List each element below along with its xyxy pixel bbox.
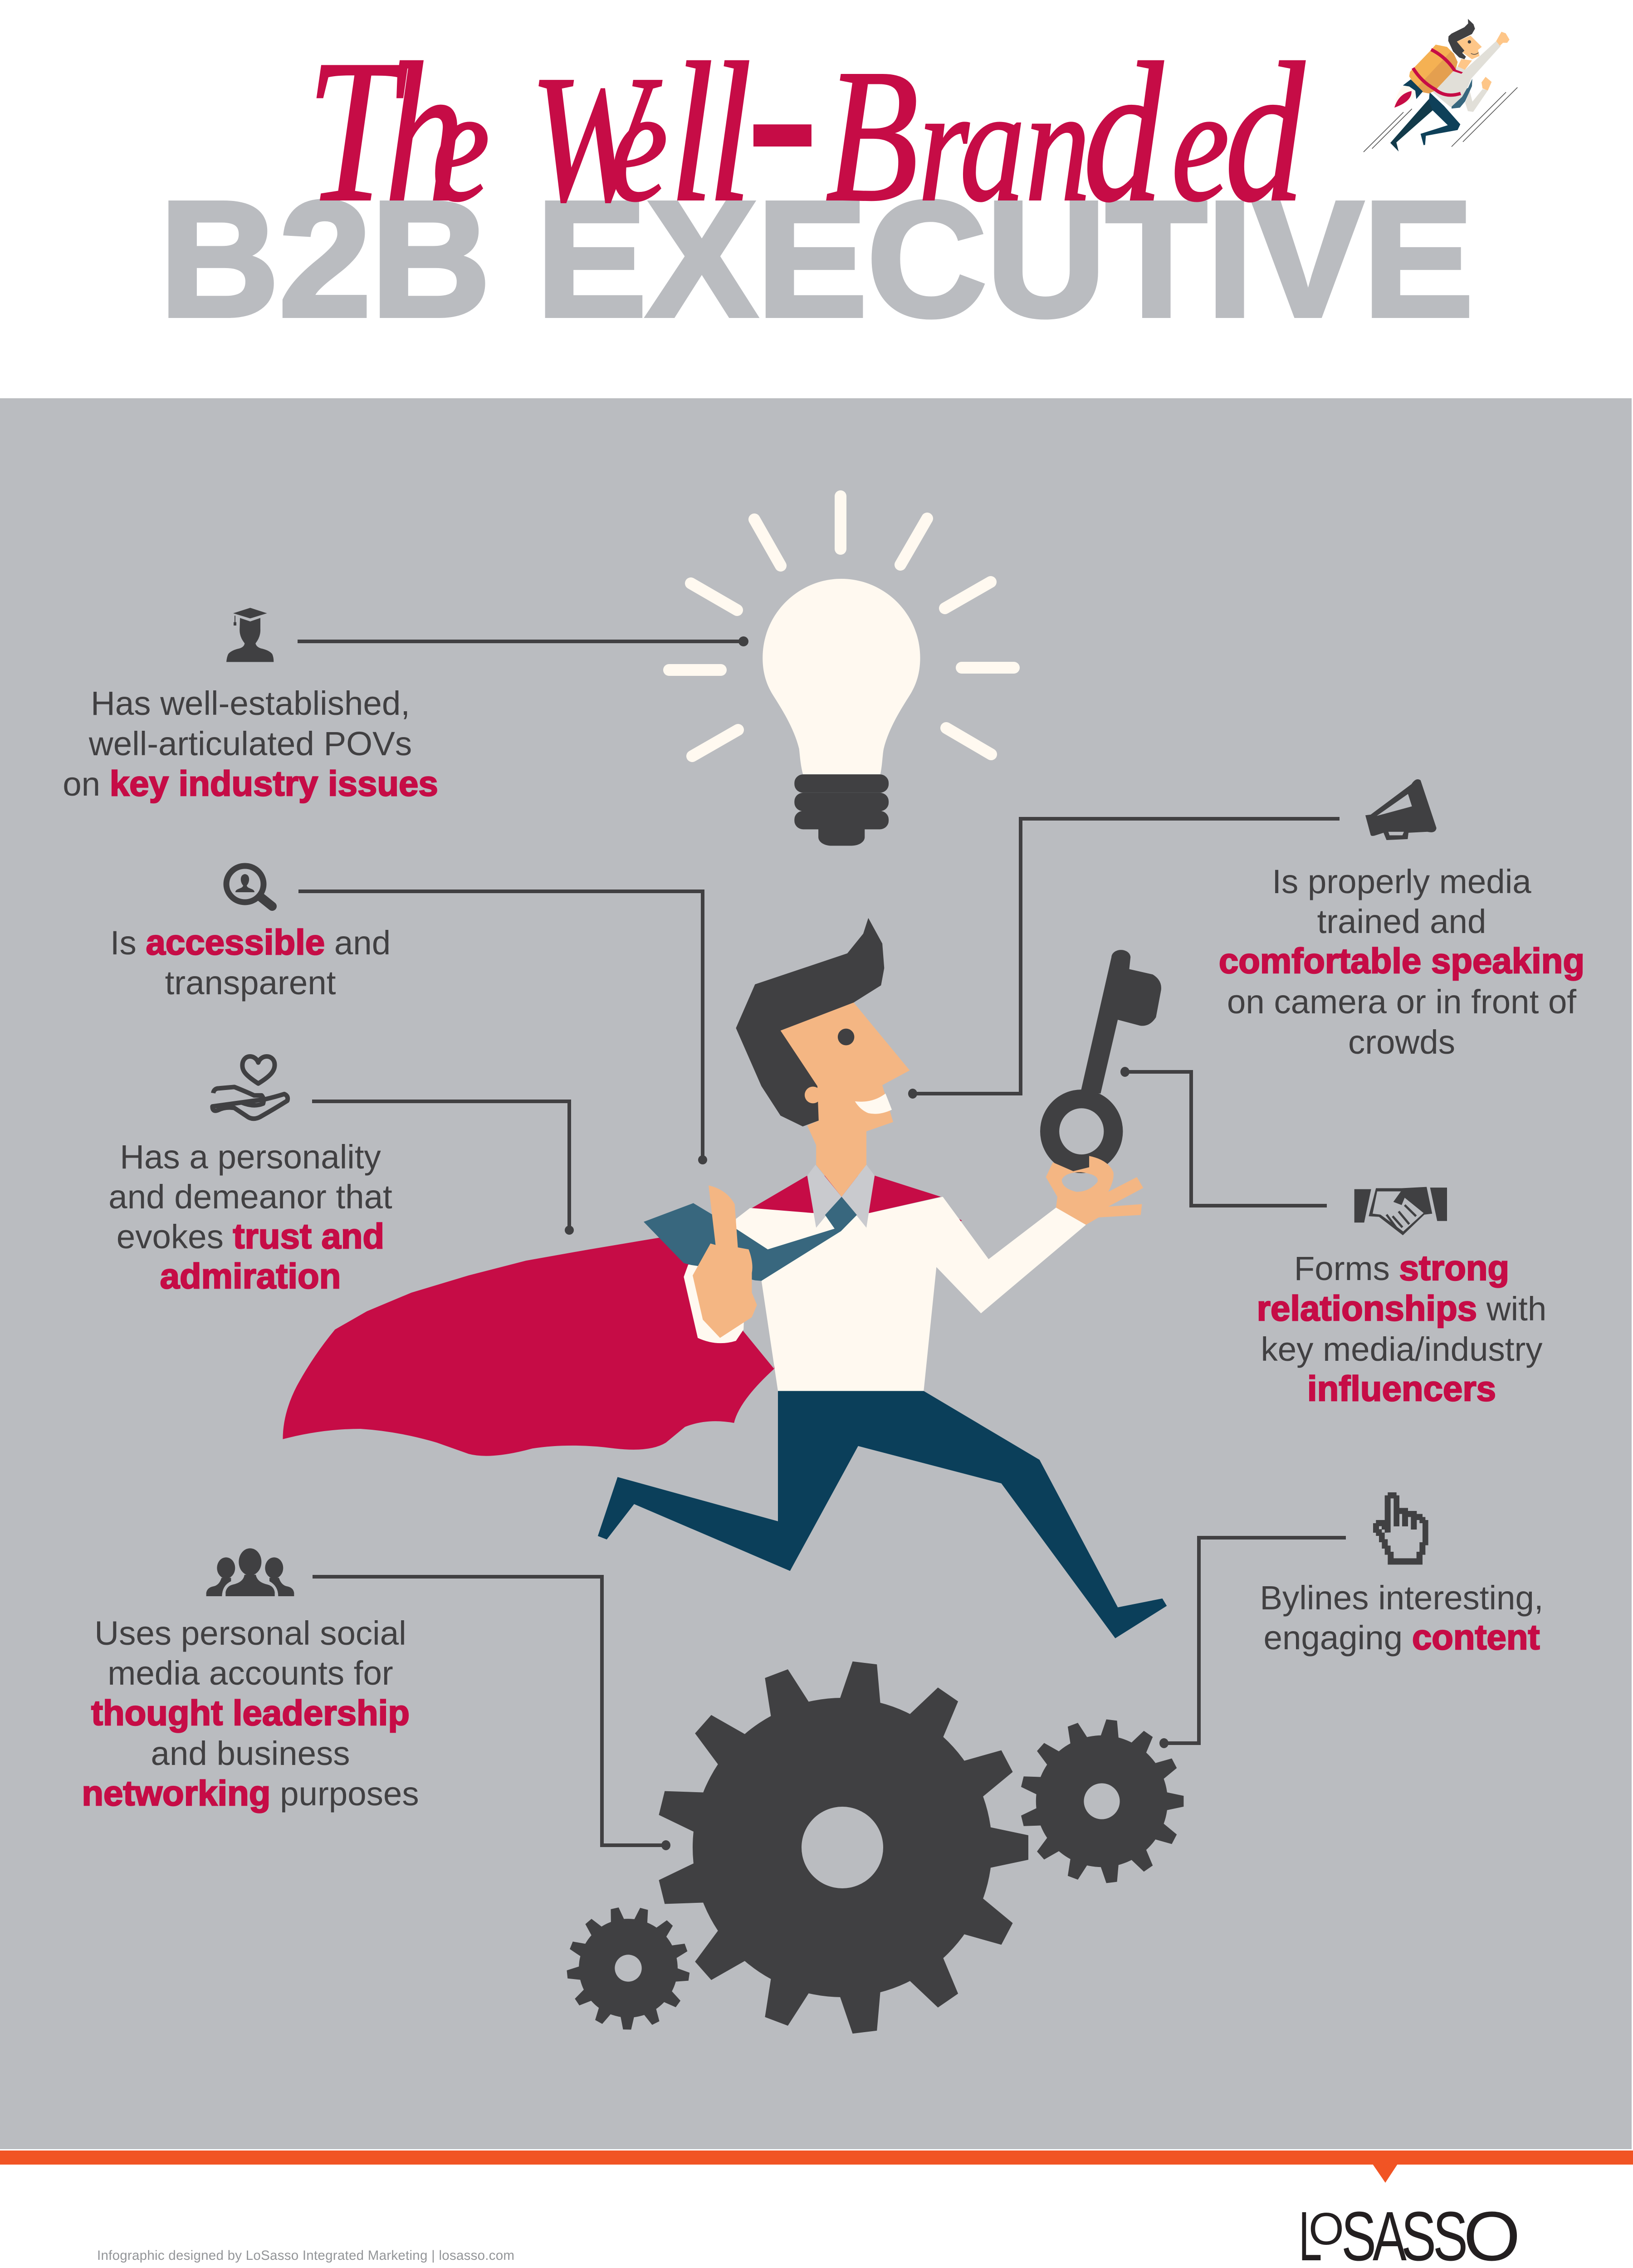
text: trust and admiration: admiration bbox=[160, 1256, 341, 1296]
icon: magnifier with person bbox=[226, 866, 272, 906]
icon: heart in hand bbox=[212, 1056, 288, 1119]
title: The Well-Branded: d bbox=[1083, 22, 1165, 243]
cape shoulders bbox=[752, 1176, 941, 1213]
title: The Well-Branded: d bbox=[1225, 22, 1307, 243]
title: The Well-Branded: l bbox=[670, 22, 714, 243]
text: bylines content: Bylines interesting, bbox=[1260, 1579, 1544, 1617]
title: The Well-Branded: e bbox=[432, 54, 490, 235]
text: strong relationships: influencers bbox=[1307, 1369, 1496, 1408]
cape bbox=[283, 1219, 962, 1456]
title: The Well-Branded: h bbox=[385, 22, 464, 243]
icon: people bbox=[206, 1548, 294, 1596]
text: POVs on key industry issues: well-articulated POVs bbox=[88, 725, 412, 763]
text: comfortable speaking: crowds bbox=[1348, 1023, 1455, 1061]
title: The Well-Branded: l bbox=[708, 22, 752, 243]
title: The Well-Branded: e bbox=[1171, 54, 1229, 235]
text: POVs on key industry issues: on key industry issues bbox=[63, 763, 438, 803]
connector: people to big gear bbox=[313, 1577, 670, 1850]
icon: left gear bbox=[559, 1898, 698, 2038]
connector: key to handshake bbox=[1120, 1067, 1327, 1206]
connector: graduate to bulb bbox=[298, 636, 748, 646]
thumbs-up hand bbox=[693, 1185, 757, 1338]
title: The Well-Branded: n bbox=[1025, 54, 1090, 235]
footer orange bar with pointer bbox=[0, 2151, 1633, 2183]
icon: handshake bbox=[1354, 1187, 1447, 1235]
text: thought leadership: and business bbox=[151, 1735, 350, 1772]
logo: LoSasso: O bbox=[1309, 2204, 1344, 2254]
text: bylines content: engaging content bbox=[1264, 1617, 1540, 1657]
text: trust and admiration: and demeanor that bbox=[108, 1178, 392, 1216]
text: POVs on key industry issues: Has well-established, bbox=[91, 684, 410, 722]
connector: pointer to right gear bbox=[1159, 1538, 1346, 1748]
text: accessible and transparent: Is accessible and bbox=[110, 922, 391, 962]
text: thought leadership: Uses personal social bbox=[94, 1614, 406, 1652]
illustration: running businessman with cape and key bbox=[283, 918, 1167, 1638]
icon: pointer hand bbox=[1373, 1492, 1428, 1564]
text: thought leadership: networking purposes bbox=[82, 1773, 419, 1813]
ear bbox=[805, 1087, 821, 1103]
face and neck bbox=[781, 1002, 909, 1197]
text: accessible and transparent: transparent bbox=[165, 964, 336, 1002]
text: strong relationships: relationships with bbox=[1257, 1288, 1546, 1328]
title: The Well-Branded: B bbox=[826, 30, 919, 241]
hair bbox=[736, 918, 884, 1126]
icon: right gear bbox=[1020, 1719, 1183, 1884]
title: The Well-Branded: a bbox=[960, 54, 1025, 235]
logo: LoSasso bbox=[1299, 2197, 1521, 2268]
key ring bbox=[1040, 1090, 1123, 1173]
tie bbox=[644, 1197, 857, 1281]
title: The Well-Branded: W bbox=[530, 38, 664, 239]
text: strong relationships: key media/industry bbox=[1261, 1330, 1543, 1368]
connector: hand to cape bbox=[312, 1101, 574, 1235]
icon: megaphone bbox=[1365, 779, 1437, 840]
trousers bbox=[598, 1391, 1167, 1638]
heading: B2B EXECUTIVE: B2B EXECUTIVE bbox=[160, 167, 1473, 351]
icon: jetpack businessman bbox=[1364, 19, 1517, 152]
hand holding key bbox=[1046, 1156, 1143, 1225]
smile bbox=[855, 1094, 892, 1114]
text: thought leadership: media accounts for bbox=[108, 1654, 393, 1692]
text: comfortable speaking: trained and bbox=[1317, 903, 1486, 940]
text: strong relationships: Forms strong bbox=[1294, 1248, 1509, 1288]
title: The Well-Branded: r bbox=[918, 54, 971, 235]
connector: mouth to megaphone bbox=[908, 819, 1340, 1099]
text: comfortable speaking: Is properly media bbox=[1272, 863, 1531, 900]
title: The Well-Branded: e bbox=[610, 54, 668, 235]
cuff bbox=[684, 1265, 745, 1343]
icon: light bulb bbox=[669, 496, 1014, 846]
title: The Well-Branded: T bbox=[307, 18, 409, 244]
panel: main grey background bbox=[0, 398, 1632, 2149]
text: comfortable speaking: on camera or in front of bbox=[1227, 983, 1576, 1021]
icon: large gear bbox=[657, 1660, 1028, 2035]
shirt bbox=[736, 1197, 1086, 1391]
collar bbox=[807, 1165, 875, 1228]
key bbox=[1081, 950, 1161, 1094]
text: thought leadership: thought leadership bbox=[91, 1693, 410, 1733]
text: trust and admiration: Has a personality bbox=[120, 1138, 381, 1176]
connector: magnifier to cape shoulder bbox=[298, 891, 707, 1164]
footer credit: Infographic designed by LoSasso Integrated Marketing | losasso.com bbox=[97, 2248, 514, 2263]
text: comfortable speaking: comfortable speaking bbox=[1219, 941, 1584, 981]
text: trust and admiration: evokes trust and bbox=[117, 1216, 384, 1256]
icon: graduate bbox=[226, 608, 274, 662]
eye bbox=[838, 1029, 854, 1045]
